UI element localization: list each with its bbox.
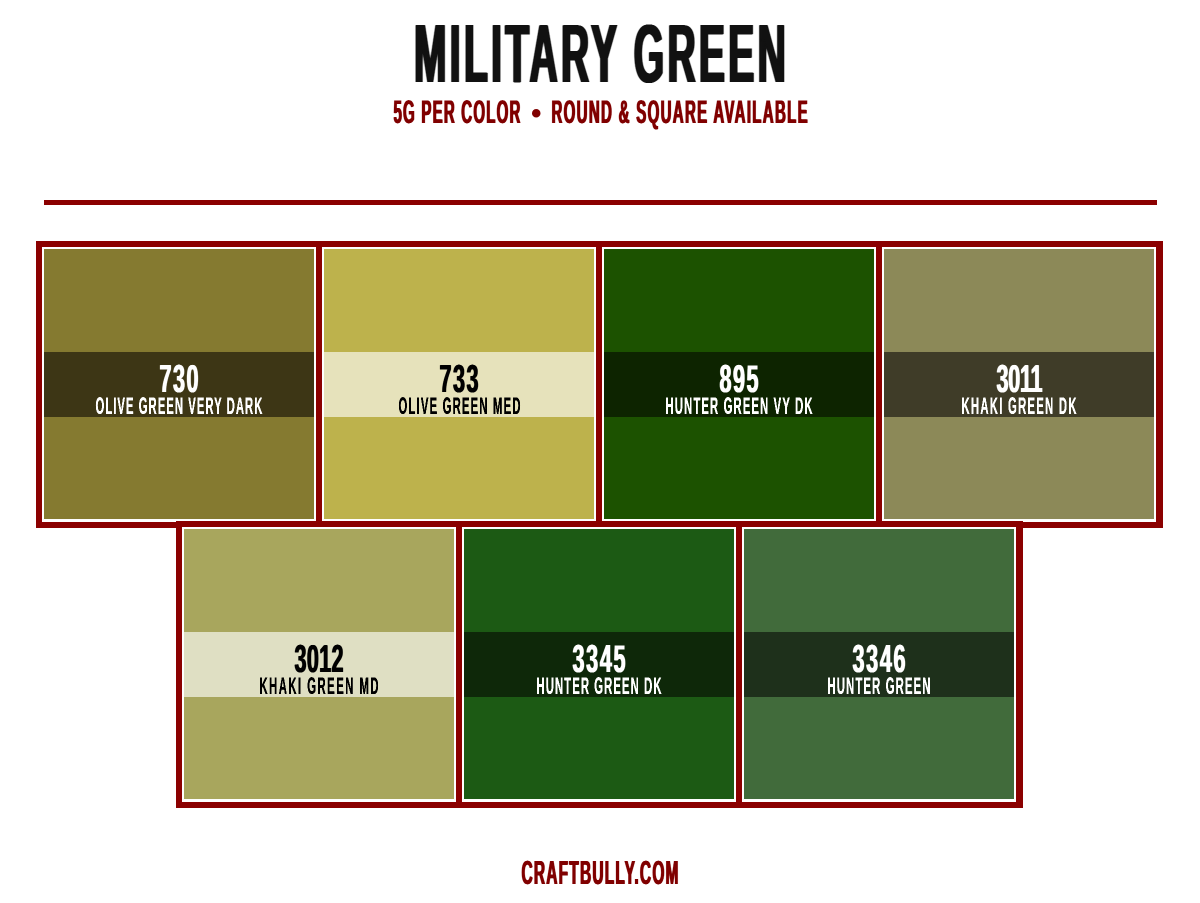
subtitle	[394, 95, 808, 131]
swatch: 730 olive green very dark	[36, 241, 323, 528]
swatch: 733 olive green med	[316, 241, 603, 528]
swatch: 3345 hunter green dk: 3345	[572, 637, 625, 681]
subtitle: ROUND & SQUARE AVAILABLE	[552, 95, 808, 131]
swatch: 895 hunter green vy dk: 895	[720, 357, 758, 401]
swatch: 733 olive green med: OLIVE GREEN MED	[398, 392, 521, 419]
swatch: 730 olive green very dark: OLIVE GREEN VERY DARK	[96, 392, 263, 419]
swatch: 3012 khaki green md: KHAKI GREEN MD	[260, 672, 379, 699]
swatch: 3345 hunter green dk: HUNTER GREEN DK	[536, 672, 662, 699]
swatch: 3011 khaki green dk: 3011	[996, 357, 1042, 401]
swatch: 3346 hunter green	[736, 521, 1023, 808]
swatch: 895 hunter green vy dk	[596, 241, 883, 528]
swatch: 895 hunter green vy dk: HUNTER GREEN VY DK	[666, 392, 813, 419]
title: MILITARY GREEN	[414, 6, 786, 100]
swatch: 3012 khaki green md: 3012	[294, 637, 344, 681]
swatch: 733 olive green med: 733	[440, 357, 478, 401]
swatch: 3012 khaki green md	[176, 521, 463, 808]
divider	[44, 200, 1157, 205]
swatch: 3011 khaki green dk: KHAKI GREEN DK	[962, 392, 1077, 419]
swatch: 730 olive green very dark: 730	[160, 357, 198, 401]
swatch: 3346 hunter green: HUNTER GREEN	[828, 672, 930, 699]
swatch: 3346 hunter green: 3346	[852, 637, 905, 681]
swatch: 3345 hunter green dk	[456, 521, 743, 808]
swatch: 3011 khaki green dk	[876, 241, 1163, 528]
footer: website: CRAFTBULLY.COM	[522, 856, 678, 892]
subtitle: 5G PER COLOR	[394, 95, 520, 131]
subtitle: •	[531, 97, 542, 130]
